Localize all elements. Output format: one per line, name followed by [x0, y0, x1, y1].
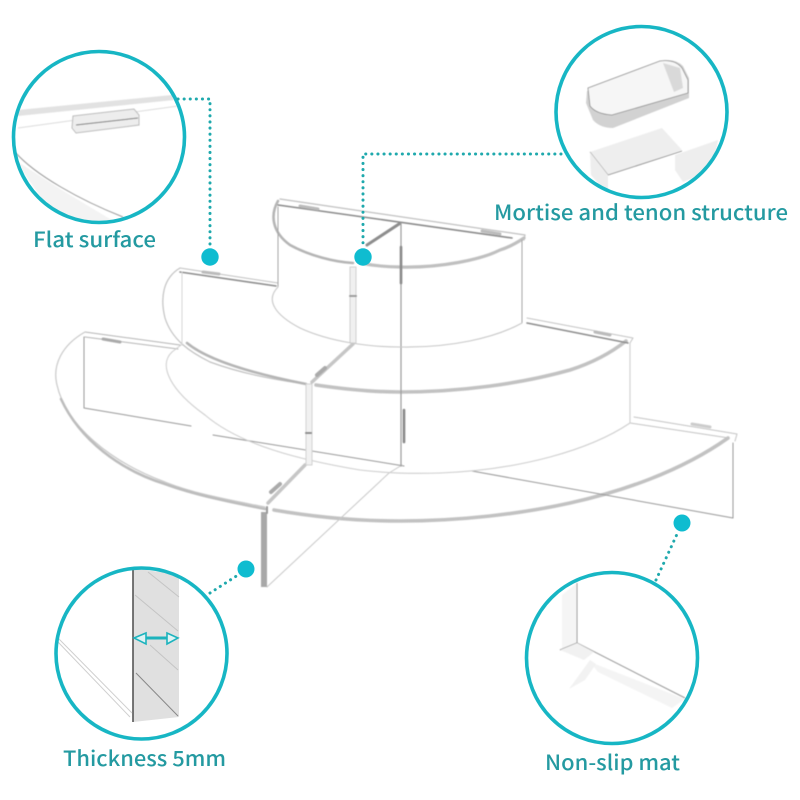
inset: thickness detail — [58, 568, 179, 722]
label: Flat surface — [33, 224, 156, 254]
connector — [656, 532, 678, 580]
label: Thickness 5mm — [63, 743, 226, 773]
label: Mortise and tenon structure — [494, 197, 788, 227]
middle tier — [163, 268, 633, 473]
ring — [526, 572, 698, 744]
label: Non-slip mat — [545, 747, 680, 777]
thickness arrow — [134, 633, 178, 644]
ring — [556, 26, 727, 198]
marker dot — [201, 248, 219, 266]
product illustration: three-tier acrylic riser — [56, 199, 737, 587]
inset: mortise and tenon detail — [586, 60, 718, 195]
callout: non-slip mat — [526, 514, 698, 777]
bottom tier — [56, 332, 737, 587]
connector — [363, 154, 561, 248]
marker dot — [354, 248, 372, 266]
callout: flat surface — [14, 52, 219, 266]
ring — [56, 568, 227, 739]
callout: thickness — [56, 560, 254, 773]
ring — [14, 52, 184, 222]
marker dot — [238, 560, 254, 578]
callout: mortise and tenon — [354, 26, 788, 266]
inset: flat surface detail — [15, 95, 178, 225]
connector — [210, 575, 238, 593]
top tier — [272, 199, 525, 466]
marker dot — [674, 514, 690, 532]
inset: non-slip mat detail — [560, 583, 685, 708]
connector — [178, 99, 210, 248]
